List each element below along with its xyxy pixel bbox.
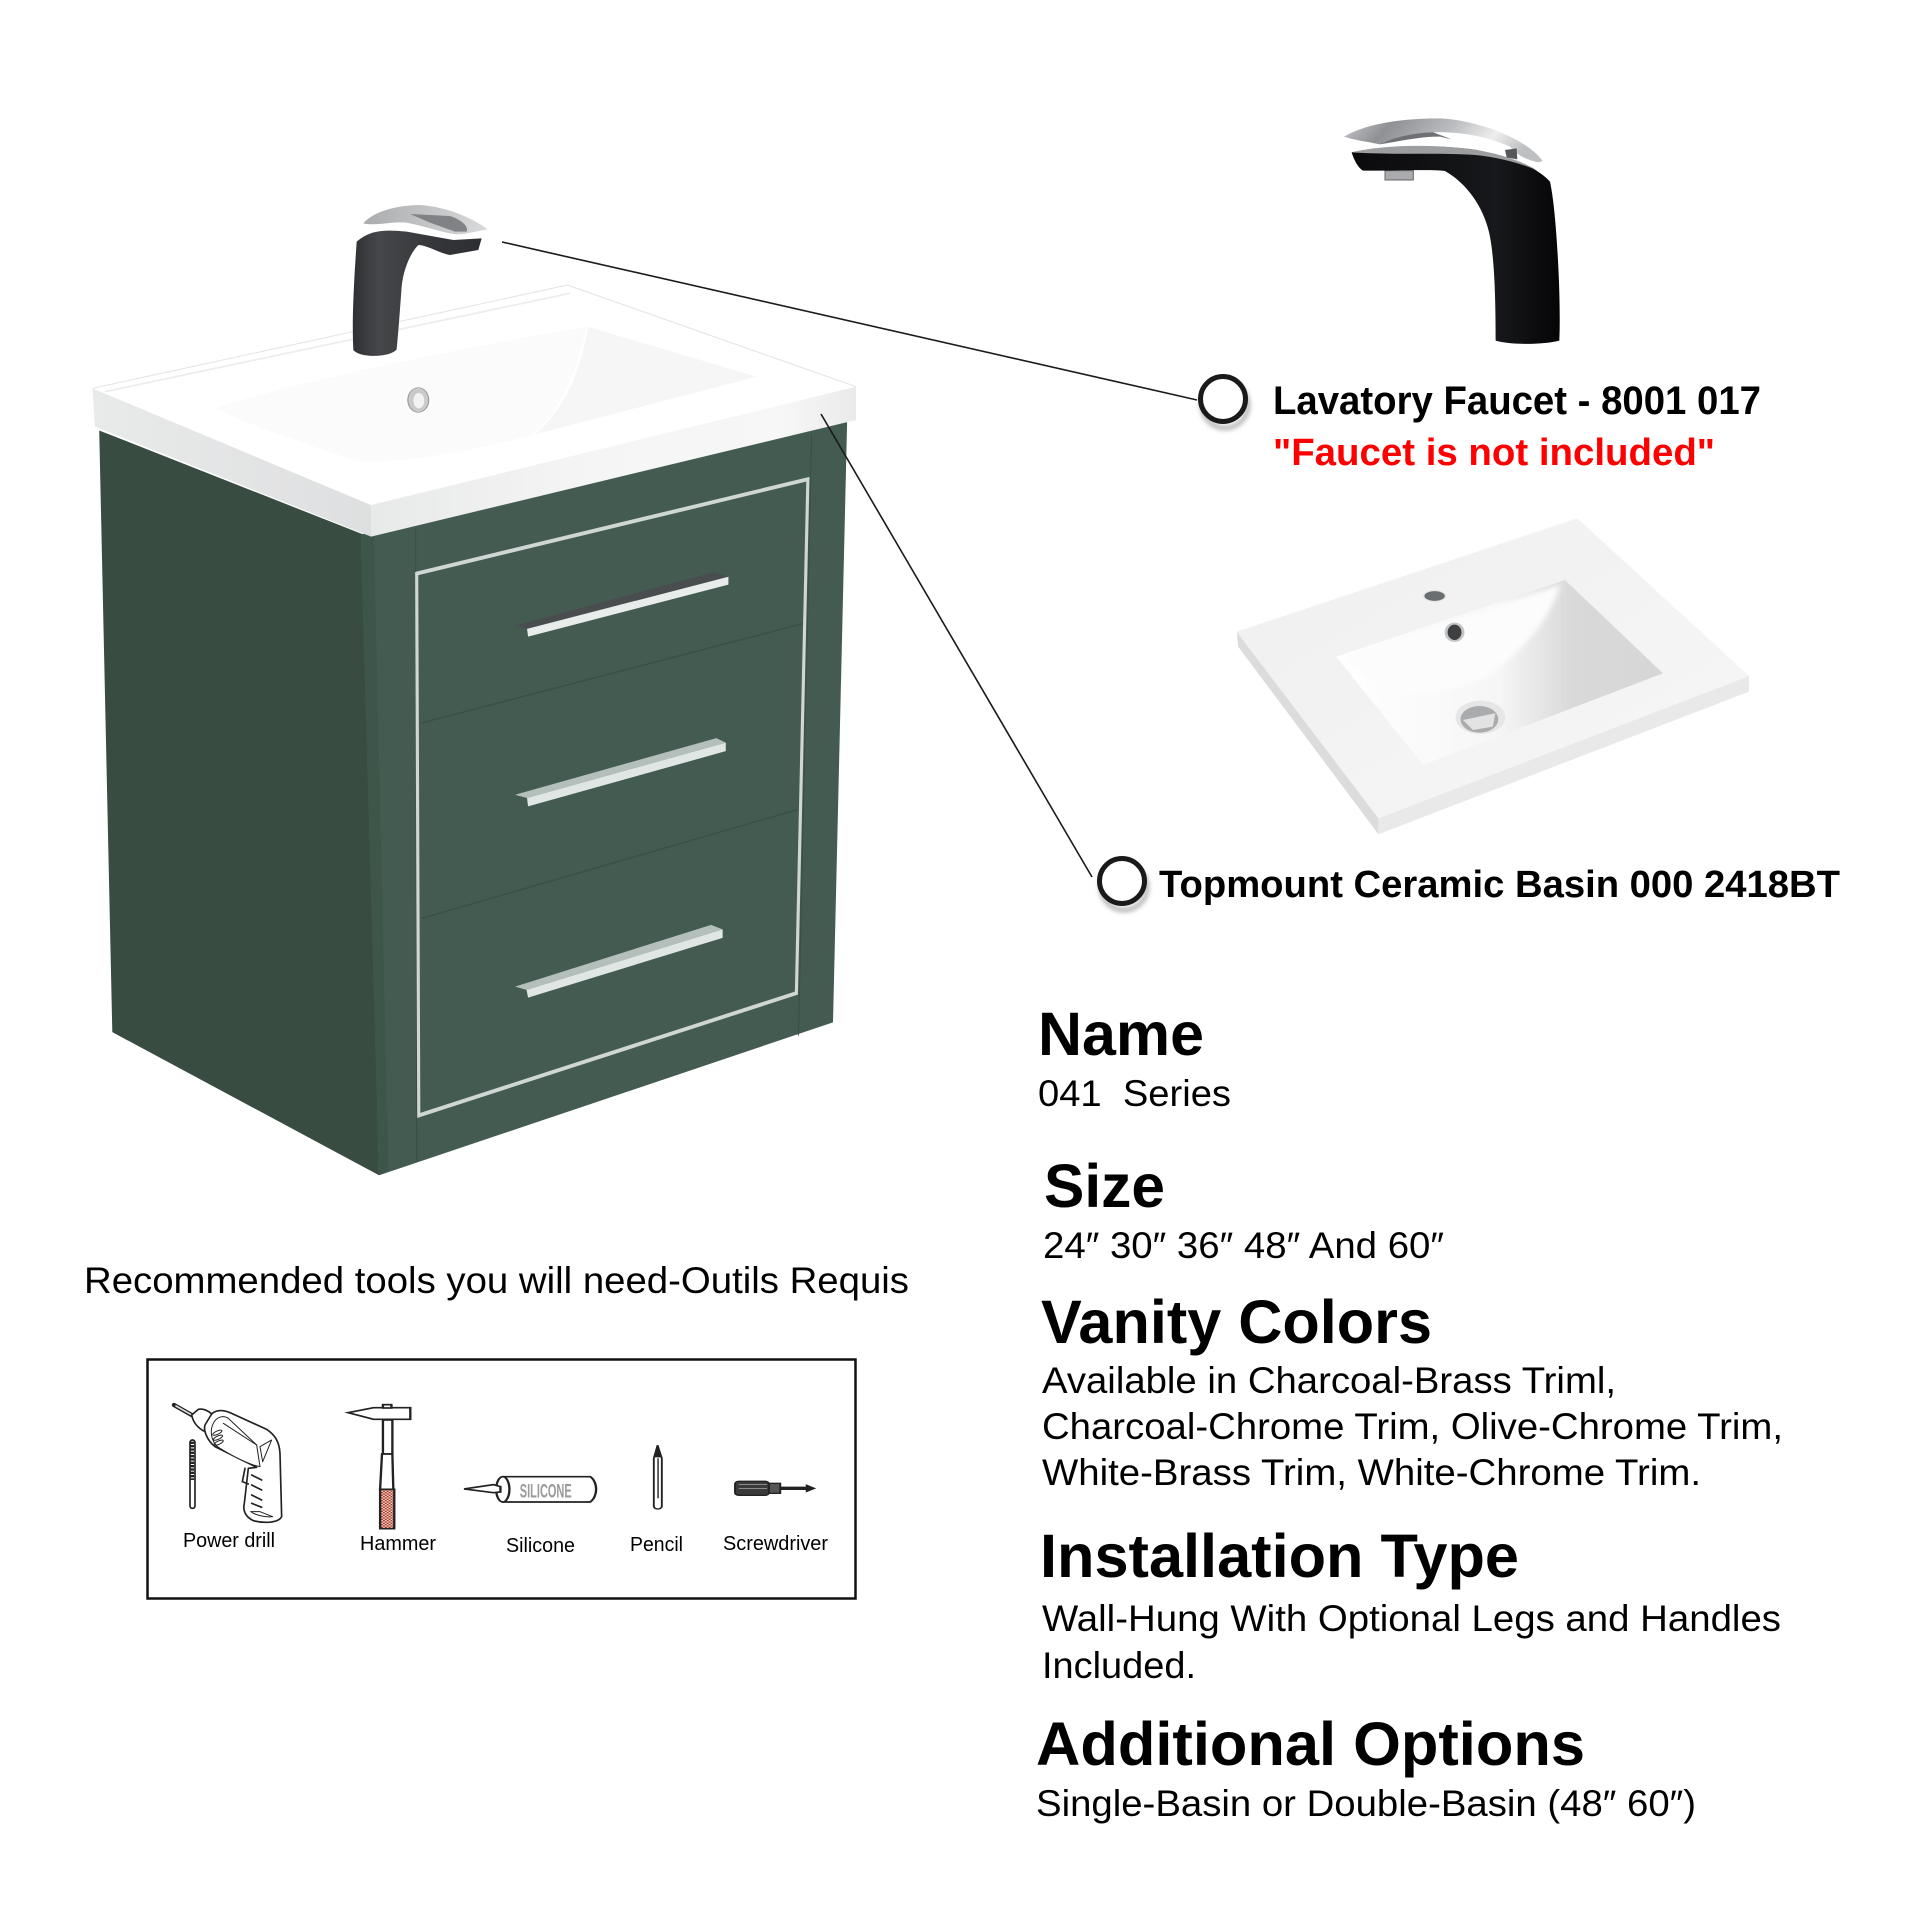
ceramic basin product image (1237, 518, 1749, 834)
heading: installation type: Installation Type (1040, 1522, 1519, 1590)
text: series: 041 Series (1038, 1073, 1231, 1114)
cabinet front face (361, 422, 847, 1175)
drawer handle middle (515, 738, 726, 806)
callout line: basin (821, 414, 1092, 877)
text: installation line 2: Included. (1042, 1645, 1196, 1686)
faucet product image (1344, 118, 1560, 344)
aerator (1385, 171, 1413, 180)
text: sizes: 24″ 30″ 36″ 48″ And 60″ (1043, 1225, 1444, 1266)
text: additional options detail: Single-Basin or Double-Basin (48″ 60″) (1036, 1783, 1696, 1824)
text: colors line 3: White-Brass Trim, White-Chrome Trim. (1042, 1452, 1701, 1493)
basin left edge (1237, 632, 1378, 834)
basin front edge (1378, 676, 1749, 834)
faucet on vanity (353, 205, 488, 356)
label: silicone: Silicone (506, 1535, 575, 1557)
cabinet side panel (99, 430, 379, 1175)
icon: pencil (654, 1445, 662, 1509)
panel: tools box (148, 1360, 856, 1598)
basin bowl (1336, 580, 1663, 765)
heading: name: Name (1038, 1000, 1204, 1068)
text: colors line 2: Charcoal-Chrome Trim, Olive-Chrome Trim, (1042, 1406, 1783, 1447)
heading: size: Size (1044, 1152, 1165, 1220)
tap hole (1424, 591, 1446, 601)
callout line: faucet (502, 242, 1197, 400)
label: screwdriver: Screwdriver (723, 1533, 828, 1555)
icon: screwdriver (735, 1481, 814, 1495)
label: topmount ceramic basin: Topmount Ceramic Basin 000 2418BT (1159, 864, 1840, 906)
chrome handle (1344, 118, 1543, 162)
faucet body (1352, 146, 1560, 344)
label: lavatory faucet: Lavatory Faucet - 8001 017 (1273, 379, 1761, 423)
icon: silicone tube: SILICONE (520, 1481, 572, 1502)
callout marker: faucet (1200, 376, 1248, 428)
overflow (1446, 624, 1463, 641)
icon: power drill (174, 1405, 282, 1522)
countertop sink (92, 285, 856, 537)
label: pencil: Pencil (630, 1534, 683, 1556)
overflow hole (408, 388, 429, 412)
icon: hammer (348, 1405, 410, 1529)
heading: vanity colors: Vanity Colors (1041, 1288, 1432, 1356)
drawer handle top (515, 572, 728, 637)
label: faucet not included: "Faucet is not included" (1273, 432, 1715, 474)
icon: silicone tube (464, 1477, 596, 1502)
drawer handle bottom (515, 925, 723, 998)
cabinet body (99, 422, 847, 1175)
label: hammer: Hammer (360, 1533, 436, 1555)
text: installation line 1: Wall-Hung With Optional Legs and Handles (1042, 1598, 1781, 1639)
heading: additional options: Additional Options (1036, 1710, 1585, 1778)
drain (1456, 701, 1505, 734)
heading: recommended tools: Recommended tools you will need-Outils Requis (84, 1260, 909, 1301)
vanity cabinet with sink and faucet (92, 205, 856, 1175)
label: power drill: Power drill (183, 1530, 275, 1552)
chrome trim frame (417, 479, 808, 1115)
text: colors line 1: Available in Charcoal-Brass Triml, (1042, 1360, 1616, 1401)
basin top surface (1237, 518, 1749, 818)
callout marker: basin (1100, 858, 1147, 910)
